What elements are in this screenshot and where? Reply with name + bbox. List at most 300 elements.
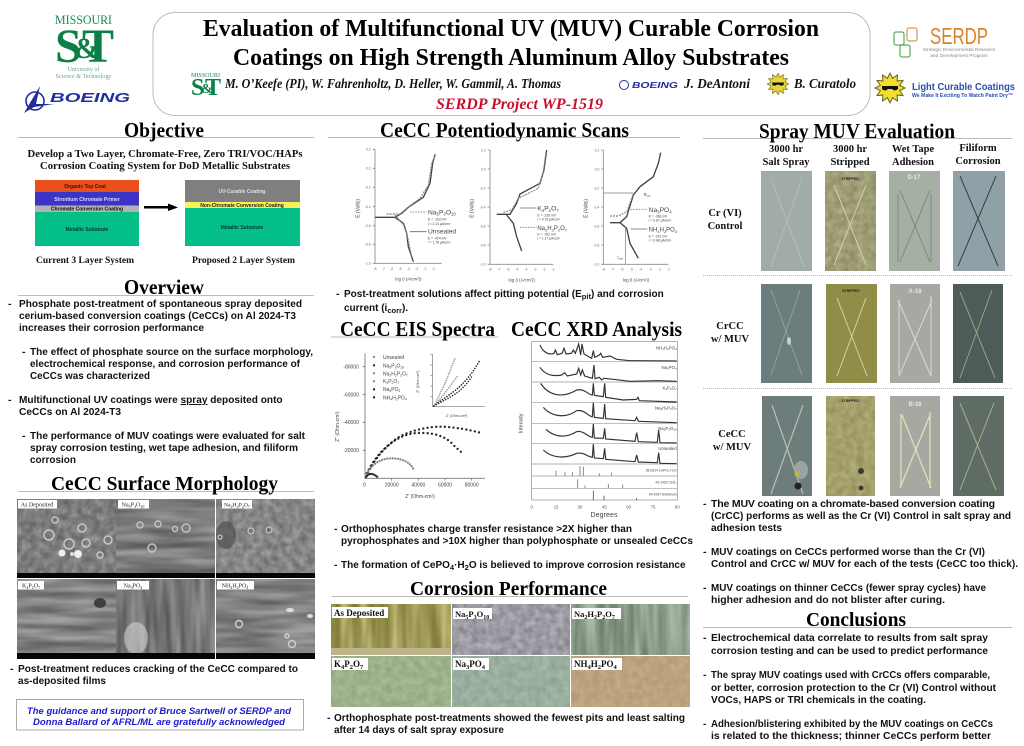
chart: XRD analysis: 43-1002 CeO₂ xyxy=(655,480,677,484)
chart: XRD analysis xyxy=(518,341,680,510)
chart panel 3: Na3PO4 and NH4H2PO4: -4 xyxy=(639,268,642,272)
photo: K4P2O7: O xyxy=(353,659,360,669)
chart panel 3: Na3PO4 and NH4H2PO4: E (Volts) xyxy=(583,199,589,218)
chart panel 1: Na5P3O10 and unsealed: P xyxy=(439,209,444,216)
chart: EIS spectra: -80000 xyxy=(343,364,359,370)
spray MUV evaluation text: adhesion tests xyxy=(711,522,782,534)
column headers: Adhesion xyxy=(892,157,934,168)
chart panel 3: Na3PO4 and NH4H2PO4: corr xyxy=(618,257,624,261)
chart: EIS spectra: 4 xyxy=(398,389,400,393)
photo: NH4H2PO4: H xyxy=(591,659,598,669)
morphology text: Post-treatment reduces cracking of the CeCC compared to xyxy=(18,663,298,675)
project number: SERDP Project WP-1519 xyxy=(436,96,603,113)
chart: EIS spectra: P xyxy=(397,371,401,377)
logo: SERDP: and Development Program xyxy=(930,53,988,59)
photo: Na3PO4: Na xyxy=(455,659,466,669)
photo: NH4H2PO4: 4 xyxy=(588,664,592,671)
panel: wet tape xyxy=(889,171,940,271)
chart: EIS spectra: 4 xyxy=(405,397,407,401)
chart: XRD analysis: 60 xyxy=(626,505,632,510)
chart: EIS spectra: 80000 xyxy=(465,483,479,489)
chart panel 3: Na3PO4 and NH4H2PO4: 0.0 xyxy=(595,167,599,171)
overview text: electrochemical response, and corrosion performance of xyxy=(30,358,300,370)
chart panel 1: Na5P3O10 and unsealed: O xyxy=(446,209,451,216)
chart panel 2: K4P2O7 and Na2H2P2O7: 0.0 xyxy=(481,167,486,171)
heading: Overview: Overview xyxy=(124,275,204,299)
photo: Na5P3O10: 5 xyxy=(465,615,468,621)
chart panel 1: Na5P3O10 and unsealed: E (Volts) xyxy=(355,199,361,218)
spray MUV evaluation text: The MUV coating on a chromate-based conversion coating xyxy=(711,498,995,510)
chart panel 3: Na3PO4 and NH4H2PO4: -0.4 xyxy=(594,205,599,209)
conclusions text: VOCs, HAPS or TRI chemicals in the coating. xyxy=(711,694,926,706)
chart panel 2: K4P2O7 and Na2H2P2O7 xyxy=(469,148,568,282)
conclusions text: or better, corrosion protection to the Cr (VI) Control without xyxy=(711,682,996,694)
chart: EIS spectra: Na xyxy=(383,371,389,377)
photo: Na5P3O10: P xyxy=(468,609,474,619)
chart panel 2: K4P2O7 and Na2H2P2O7: 2 xyxy=(552,227,555,232)
chart: EIS spectra: Na xyxy=(383,363,389,369)
chart panel 3: Na3PO4 and NH4H2PO4: i = 0.88 μA/cm² xyxy=(649,238,672,242)
spray MUV evaluation text: Control and CrCC w/ MUV for each of the tests (CeCC too thick). xyxy=(711,558,1018,570)
chart: EIS spectra: 3 xyxy=(389,389,391,393)
corrosion performance text xyxy=(327,712,685,736)
heading: CeCC EIS Spectra: CeCC EIS Spectra xyxy=(340,317,495,341)
heading: CeCC Surface Morphology: CeCC Surface Morphology xyxy=(51,473,278,495)
chart panel 2: K4P2O7 and Na2H2P2O7: -3 xyxy=(534,268,537,272)
XRD axis label: Degrees: Degrees xyxy=(590,512,618,519)
chart panel 3: Na3PO4 and NH4H2PO4: 4 xyxy=(657,229,660,234)
column headers: Filiform xyxy=(959,143,997,154)
photo: NH4H2PO4: 2 xyxy=(598,664,601,671)
diagram: current 3 layer system xyxy=(35,180,139,246)
chart: XRD analysis: 10 xyxy=(673,428,677,432)
potentiodynamic text: current (i xyxy=(344,303,387,314)
row label: Cr (VI) Control: Control xyxy=(708,221,742,232)
photo: Na3PO4: 3 xyxy=(466,664,470,671)
chart: EIS spectra: Z'' (Ohm-cm²) xyxy=(335,411,341,442)
chart panel 1: Na5P3O10 and unsealed: i = 1.76 μA/cm² xyxy=(428,240,451,244)
micrograph: Na5P3O10: 3 xyxy=(134,504,136,509)
panel: wet tape xyxy=(890,396,940,496)
photo: K4P2O7: 7 xyxy=(360,664,364,671)
chart panel 2: K4P2O7 and Na2H2P2O7: -0.4 xyxy=(480,205,486,209)
photo: Na3PO4: 4 xyxy=(482,664,486,671)
micrograph: Na3PO4: 4 xyxy=(140,585,142,590)
chart panel 3: Na3PO4 and NH4H2PO4: -8 xyxy=(602,268,605,272)
chart panel 2: K4P2O7 and Na2H2P2O7: 2 xyxy=(545,227,548,232)
micrograph: NH4H2PO4: 4 xyxy=(246,585,248,590)
micrograph: Na3PO4: Na xyxy=(124,584,131,590)
panel: stripped: STRIPPED xyxy=(841,399,859,403)
chart panel 1: Na5P3O10 and unsealed: -1.0 xyxy=(365,262,371,266)
logo: small Missouri S&T xyxy=(191,72,221,101)
chart: EIS spectra: 7 xyxy=(406,373,408,377)
heading: Objective: Objective xyxy=(124,118,204,142)
authors: Boeing: J. DeAntoni xyxy=(683,76,750,91)
chart panel 1: Na5P3O10 and unsealed: -7 xyxy=(382,267,385,271)
potentiodynamic text xyxy=(336,288,664,315)
micrograph: Na5P3O10: O xyxy=(136,502,141,508)
chart: EIS spectra: H xyxy=(392,395,396,401)
photo: Na2H2P2O7: H xyxy=(587,609,594,619)
overview text: cerium-based conversion coatings (CeCCs) on Al 2024-T3 xyxy=(19,310,296,322)
potentiodynamic text: pit xyxy=(582,292,591,301)
EIS and XRD text: The formation of CePO xyxy=(341,560,450,571)
chart panel 1: Na5P3O10 and unsealed: -0.8 xyxy=(365,243,371,247)
row label: CrCC w/ MUV xyxy=(711,321,750,345)
chart panel 1: Na5P3O10 and unsealed: -3 xyxy=(415,267,418,271)
title xyxy=(203,16,819,71)
chart panel 3: Na3PO4 and NH4H2PO4: NH xyxy=(649,228,657,234)
overview text: Phosphate post-treatment of spontaneous spray deposited xyxy=(19,298,302,310)
chart: EIS spectra: 2 xyxy=(396,397,398,401)
conclusions text xyxy=(703,632,996,742)
chart: XRD analysis: K xyxy=(662,385,665,390)
chart: XRD analysis: 3 xyxy=(667,367,669,371)
panel: wet tape xyxy=(890,284,940,383)
chart panel 2: K4P2O7 and Na2H2P2O7: 7 xyxy=(565,227,568,232)
EIS and XRD text: Orthophosphates charge transfer resistance >2X higher than xyxy=(341,523,632,535)
chart: XRD analysis: 4 xyxy=(665,387,667,391)
row label: Cr (VI) Control xyxy=(708,208,742,232)
chart panel 2: K4P2O7 and Na2H2P2O7: P xyxy=(544,206,549,213)
title: Evaluation of Multifunctional UV (MUV) Curable Corrosion xyxy=(203,16,819,42)
diagram captions xyxy=(36,256,295,266)
chart panel 2: K4P2O7 and Na2H2P2O7: 2 xyxy=(558,227,561,232)
overview text: - xyxy=(22,346,26,358)
photo: K4P2O7: 4 xyxy=(341,664,345,671)
chart: EIS spectra: 5 xyxy=(389,365,391,369)
potentiodynamic text: Post-treatment solutions affect pitting potential (E xyxy=(344,289,582,300)
logo: small Missouri S&T: MISSOURI xyxy=(191,72,220,79)
chart: EIS spectra: 2 xyxy=(395,373,397,377)
chart panel 2: K4P2O7 and Na2H2P2O7: -2 xyxy=(543,268,546,272)
chart panel 2: K4P2O7 and Na2H2P2O7: K xyxy=(537,206,542,213)
chart panel 2: K4P2O7 and Na2H2P2O7: -7 xyxy=(498,268,501,272)
chart panel 3: Na3PO4 and NH4H2PO4: -3 xyxy=(649,268,652,272)
chart panel 3: Na3PO4 and NH4H2PO4: i = 0.87 μA/cm² xyxy=(649,219,672,223)
chart panel 2: K4P2O7 and Na2H2P2O7: E = -152 mV xyxy=(537,232,557,236)
spray MUV evaluation text: - xyxy=(703,546,707,558)
spray MUV evaluation text xyxy=(703,498,1018,606)
chart panel 1: Na5P3O10 and unsealed: Na xyxy=(428,209,437,216)
acknowledgement box: Donna Ballard of AFRL/ML are gratefully acknowledged xyxy=(33,717,285,728)
chart panel 3: Na3PO4 and NH4H2PO4: Na xyxy=(649,207,657,214)
row label: CrCC w/ MUV: w/ MUV xyxy=(711,334,750,345)
chart: EIS spectra: 2 xyxy=(389,373,391,377)
micrograph: K4P2O7: O xyxy=(34,584,39,590)
chart panel 1: Na5P3O10 and unsealed: E = -424 mV xyxy=(428,236,447,240)
authors: Light Curable Coatings: B. Curatolo xyxy=(793,76,856,91)
chart: XRD analysis: 2 xyxy=(667,347,669,351)
chart: XRD analysis: 7 xyxy=(675,407,677,411)
row label: CeCC w/ MUV: w/ MUV xyxy=(713,442,752,453)
heading: CeCC Potentiodynamic Scans: CeCC Potentiodynamic Scans xyxy=(380,118,629,142)
photo: Na3PO4 xyxy=(452,656,570,707)
acknowledgement box: The guidance and support of Bruce Sartwell of SERDP and xyxy=(27,706,291,717)
corrosion panel photos xyxy=(331,604,690,707)
column headers: 3000 hr xyxy=(769,144,803,155)
photo: Na2H2P2O7 xyxy=(571,604,690,655)
overview text: - xyxy=(8,298,12,310)
photo: Na5P3O10: 10 xyxy=(483,615,489,621)
photo: Na2H2P2O7: 2 xyxy=(594,615,597,621)
column headers: Stripped xyxy=(830,157,870,168)
chart panel 1: Na5P3O10 and unsealed: -2 xyxy=(424,267,427,271)
morphology text xyxy=(10,663,298,687)
chart panel 1: Na5P3O10 and unsealed: -6 xyxy=(390,267,393,271)
photo: NH4H2PO4: PO xyxy=(601,659,614,669)
micrograph: NH4H2PO4: H xyxy=(232,584,237,590)
logo: Light Curable Coatings: We Make It Exciting To Watch Paint Dry™ xyxy=(912,93,1013,99)
logo: Light Curable Coatings xyxy=(875,73,1015,103)
spray MUV evaluation text: - xyxy=(703,582,707,594)
panel: filiform xyxy=(953,284,1003,383)
photo: K4P2O7: K xyxy=(334,659,341,669)
chart panel 1: Na5P3O10 and unsealed: i = 2.14 μA/cm² xyxy=(428,222,451,226)
conclusions text: The spray MUV coatings used with CrCCs offers comparable, xyxy=(711,669,990,681)
chart: XRD analysis: 30 xyxy=(578,505,583,510)
title box xyxy=(153,12,870,116)
micrograph: Na3PO4: 3 xyxy=(131,585,133,590)
potentiodynamic text: - xyxy=(336,288,340,300)
row label: CrCC w/ MUV: CrCC xyxy=(716,321,744,332)
chart: XRD analysis: Na xyxy=(662,365,667,370)
chart: XRD analysis: 7 xyxy=(675,387,677,391)
micrograph: NH4H2PO4: PO xyxy=(239,584,247,590)
chart: EIS spectra: 0 xyxy=(363,483,366,489)
icon: small sun xyxy=(767,73,789,95)
chart: EIS spectra: -20000 xyxy=(343,448,359,454)
logo: Missouri S&T: T xyxy=(82,20,114,73)
micrograph: K4P2O7: P xyxy=(28,584,32,590)
chart: EIS spectra: -40000 xyxy=(343,420,359,426)
chart panel 1: Na5P3O10 and unsealed: -0.4 xyxy=(365,205,371,209)
logo: small Boeing: BOEING xyxy=(632,81,678,90)
micrograph: Na5P3O10: Na xyxy=(122,502,129,508)
EIS and XRD text: pyrophosphates and >10X higher than polyphosphate or unsealed CeCCs xyxy=(341,535,693,547)
chart: XRD analysis: 2 xyxy=(670,387,672,391)
chart: XRD analysis: NH xyxy=(656,345,662,350)
chart: XRD analysis: P xyxy=(665,426,668,431)
dotted separators xyxy=(703,276,1012,388)
EIS and XRD text: 2 xyxy=(465,563,469,572)
overview text: corrosion xyxy=(30,454,76,466)
micrograph: Na2H2P2O7: P xyxy=(239,502,242,508)
chart panel 3: Na3PO4 and NH4H2PO4: -6 xyxy=(621,268,624,272)
EIS and XRD text: ·H xyxy=(454,560,465,571)
chart panel 1: Na5P3O10 and unsealed: -8 xyxy=(374,267,377,271)
chart panel 2: K4P2O7 and Na2H2P2O7: Na xyxy=(537,226,545,232)
chart: EIS spectra: Unsealed xyxy=(383,355,404,361)
chart panel 3: Na3PO4 and NH4H2PO4: -1 xyxy=(667,268,670,272)
chart: EIS spectra: 60000 xyxy=(438,483,452,489)
micrograph: Na2H2P2O7 xyxy=(216,499,315,578)
photo: Na2H2P2O7: Na xyxy=(574,609,584,619)
chart panel 1: Na5P3O10 and unsealed: -4 xyxy=(407,267,410,271)
chart: XRD analysis: Na xyxy=(655,405,661,410)
panels: Cr (VI) Control xyxy=(761,171,1005,271)
potentiodynamic text: ). xyxy=(402,303,408,314)
chart: EIS spectra xyxy=(335,353,485,500)
chart: EIS spectra: -60000 xyxy=(343,392,359,398)
corrosion performance text: after 14 days of salt spray exposure xyxy=(334,724,504,736)
column headers: Wet Tape xyxy=(892,144,934,155)
micrograph: Na5P3O10 xyxy=(116,499,215,578)
logo: SERDP: SERDP xyxy=(930,23,988,49)
micrograph: NH4H2PO4: 2 xyxy=(237,585,239,590)
chart panel 3: Na3PO4 and NH4H2PO4: H xyxy=(660,228,664,234)
chart panel 3: Na3PO4 and NH4H2PO4: -0.8 xyxy=(594,243,599,247)
chart: EIS spectra: 2 xyxy=(400,373,402,377)
diagram: current 3 layer system: Metallic Substrate xyxy=(66,227,109,233)
spray MUV evaluation text: MUV coatings on thinner CeCCs (fewer spray cycles) have xyxy=(711,582,986,594)
chart: XRD analysis: 3 xyxy=(668,428,670,432)
chart panel 1: Na5P3O10 and unsealed: 10 xyxy=(451,212,456,217)
conclusions text: - xyxy=(703,718,707,730)
chart: XRD analysis: 04-0787 Aluminum xyxy=(649,492,677,496)
micrograph: Na3PO4: PO xyxy=(133,584,141,590)
logo: SERDP: Strategic Environmental Research xyxy=(923,47,996,53)
micrograph: NH4H2PO4: NH xyxy=(222,584,230,590)
micrograph: K4P2O7: 7 xyxy=(38,585,40,590)
chart: EIS spectra: PO xyxy=(398,395,405,401)
chart panel 2: K4P2O7 and Na2H2P2O7: -0.8 xyxy=(480,243,486,247)
chart: EIS spectra: P xyxy=(388,379,392,385)
micrograph: Na3PO4 xyxy=(116,579,215,659)
chart panel 3: Na3PO4 and NH4H2PO4: -2 xyxy=(658,268,661,272)
panel: salt spray xyxy=(761,171,812,271)
photo: K4P2O7: P xyxy=(344,659,350,669)
photo: NH4H2PO4: NH xyxy=(574,659,588,669)
photo: Na2H2P2O7: P xyxy=(597,609,602,619)
micrograph: K4P2O7: 2 xyxy=(32,585,34,590)
chart: XRD analysis: 0 xyxy=(530,505,533,510)
photo: K4P2O7 xyxy=(331,656,451,707)
panel: salt spray xyxy=(761,284,812,383)
morphology text: - xyxy=(10,663,14,675)
logo: small Boeing xyxy=(620,80,678,90)
photo: K4P2O7: 2 xyxy=(350,664,353,671)
chart panel 3: Na3PO4 and NH4H2PO4: 0.2 xyxy=(595,148,599,152)
overview text: increases their corrosion performance xyxy=(19,322,204,334)
overview text: spray corrosion testing, wet tape adhesion, and filiform xyxy=(30,442,298,454)
chart panel 2: K4P2O7 and Na2H2P2O7: 2 xyxy=(549,208,552,213)
photo: Na5P3O10: Na xyxy=(455,609,465,619)
objective statement: Develop a Two Layer, Chromate-Free, Zero TRI/VOC/HAPs xyxy=(28,149,302,160)
chart: XRD analysis: P xyxy=(667,405,670,410)
logo: Missouri S&T: S xyxy=(55,20,82,73)
chart panel 3: Na3PO4 and NH4H2PO4: PO xyxy=(660,207,669,214)
chart: XRD analysis: PO xyxy=(669,365,676,370)
overview text: - xyxy=(8,394,12,406)
photo: Na2H2P2O7: 2 xyxy=(602,615,605,621)
chart panel 3: Na3PO4 and NH4H2PO4: 3 xyxy=(657,209,660,214)
SEM micrographs xyxy=(17,499,315,659)
conclusions text: - xyxy=(703,669,707,681)
panel: stripped xyxy=(826,284,877,383)
micrograph: Na2H2P2O7: 2 xyxy=(237,504,239,509)
heading: Corrosion Performance: Corrosion Performance xyxy=(410,578,607,600)
chart: XRD analysis: 2 xyxy=(665,407,667,411)
chart panel 2: K4P2O7 and Na2H2P2O7: -1 xyxy=(552,268,555,272)
column headers xyxy=(763,143,1001,168)
micrograph: Na2H2P2O7: O xyxy=(244,502,248,508)
panel: stripped xyxy=(826,396,875,496)
spray MUV evaluation text: MUV coatings on CeCCs performed worse than the Cr (VI) xyxy=(711,546,985,558)
chart panel 3: Na3PO4 and NH4H2PO4: -0.6 xyxy=(594,224,599,228)
conclusions text: is related to the thickness; thinner CeCCs perform better xyxy=(711,730,991,742)
chart panel 3: Na3PO4 and NH4H2PO4: pit xyxy=(647,194,650,198)
chart panel 1: Na5P3O10 and unsealed: E = -163 mV xyxy=(428,217,447,221)
panel: filiform xyxy=(953,171,1005,271)
photo: Na2H2P2O7: 7 xyxy=(612,615,615,621)
chart panel 2: K4P2O7 and Na2H2P2O7: 0.2 xyxy=(481,148,486,152)
chart: EIS spectra: K xyxy=(383,379,386,385)
potentiodynamic text: ) and corrosion xyxy=(591,289,664,300)
chart: XRD analysis: PO xyxy=(669,345,676,350)
logo: small Missouri S&T: T xyxy=(205,75,221,101)
chart panel 2: K4P2O7 and Na2H2P2O7: E = -226 mV xyxy=(537,213,557,217)
photo: Na5P3O10: 3 xyxy=(474,615,477,621)
chart panel 2: K4P2O7 and Na2H2P2O7: H xyxy=(547,226,552,232)
column headers: Salt Spray xyxy=(763,157,810,168)
heading: CeCC XRD Analysis: CeCC XRD Analysis xyxy=(511,317,682,341)
chart: XRD analysis: 45 xyxy=(602,505,607,510)
chart: EIS spectra: 20000 xyxy=(385,483,399,489)
chart: XRD analysis: O xyxy=(672,385,676,390)
chart panel 3: Na3PO4 and NH4H2PO4 xyxy=(583,148,678,282)
logo: small Missouri S&T: & xyxy=(201,82,213,97)
chart panel 3: Na3PO4 and NH4H2PO4: log (i (A/cm²)) xyxy=(623,277,650,282)
overview text: CeCCs on Al 2024-T3 xyxy=(19,406,121,418)
chart panel 1: Na5P3O10 and unsealed: 0.2 xyxy=(366,148,371,152)
chart panel 3: Na3PO4 and NH4H2PO4: 2 xyxy=(664,229,667,234)
panel: wet tape: A-18 xyxy=(908,289,922,295)
chart panel 3: Na3PO4 and NH4H2PO4: -7 xyxy=(611,268,614,272)
chart panel 2: K4P2O7 and Na2H2P2O7: 4 xyxy=(542,208,545,213)
chart: XRD analysis: 4 xyxy=(675,347,677,351)
diagram captions: Proposed 2 Layer System xyxy=(192,256,295,266)
spray MUV evaluation text: higher adhesion and do not blister after curing. xyxy=(711,594,945,606)
micrograph: Na2H2P2O7: H xyxy=(233,502,237,508)
logo: Missouri S&T: MISSOURI xyxy=(55,12,112,27)
chart: XRD analysis: Intensity xyxy=(519,413,525,433)
logo: Missouri S&T: & xyxy=(74,32,99,65)
diagram: proposed 2 layer system: UV-Curable Coating xyxy=(219,189,265,195)
photo: NH4H2PO4 xyxy=(571,656,690,707)
panel: wet tape: D-17 xyxy=(907,175,921,181)
photo: Na2H2P2O7: 2 xyxy=(584,615,587,621)
title: Coatings on High Strength Aluminum Alloy Substrates xyxy=(233,45,789,71)
chart: EIS spectra: 4 xyxy=(386,381,388,385)
chart: EIS spectra: 4 xyxy=(390,397,392,401)
logo: Missouri S&T: University of xyxy=(68,66,99,73)
diagram: proposed 2 layer system: Metallic Substrate xyxy=(221,225,264,231)
arrow xyxy=(144,204,178,211)
chart: XRD analysis: 4 xyxy=(675,367,677,371)
chart: XRD analysis: Unsealed xyxy=(658,446,677,451)
chart panel 1: Na5P3O10 and unsealed: Unsealed xyxy=(428,229,456,236)
chart panel 2: K4P2O7 and Na2H2P2O7: 7 xyxy=(556,208,559,213)
chart panel 2: K4P2O7 and Na2H2P2O7: -0.6 xyxy=(480,224,486,228)
micrograph: Na2H2P2O7: Na xyxy=(224,502,231,508)
panels: CeCC w/ MUV xyxy=(762,396,1004,496)
logo: small Missouri S&T: S xyxy=(191,75,204,101)
panel: filiform xyxy=(953,396,1004,496)
morphology text: as-deposited films xyxy=(18,675,106,687)
diagram: proposed 2 layer system: Non-Chromate Conversion Coating xyxy=(200,203,284,209)
